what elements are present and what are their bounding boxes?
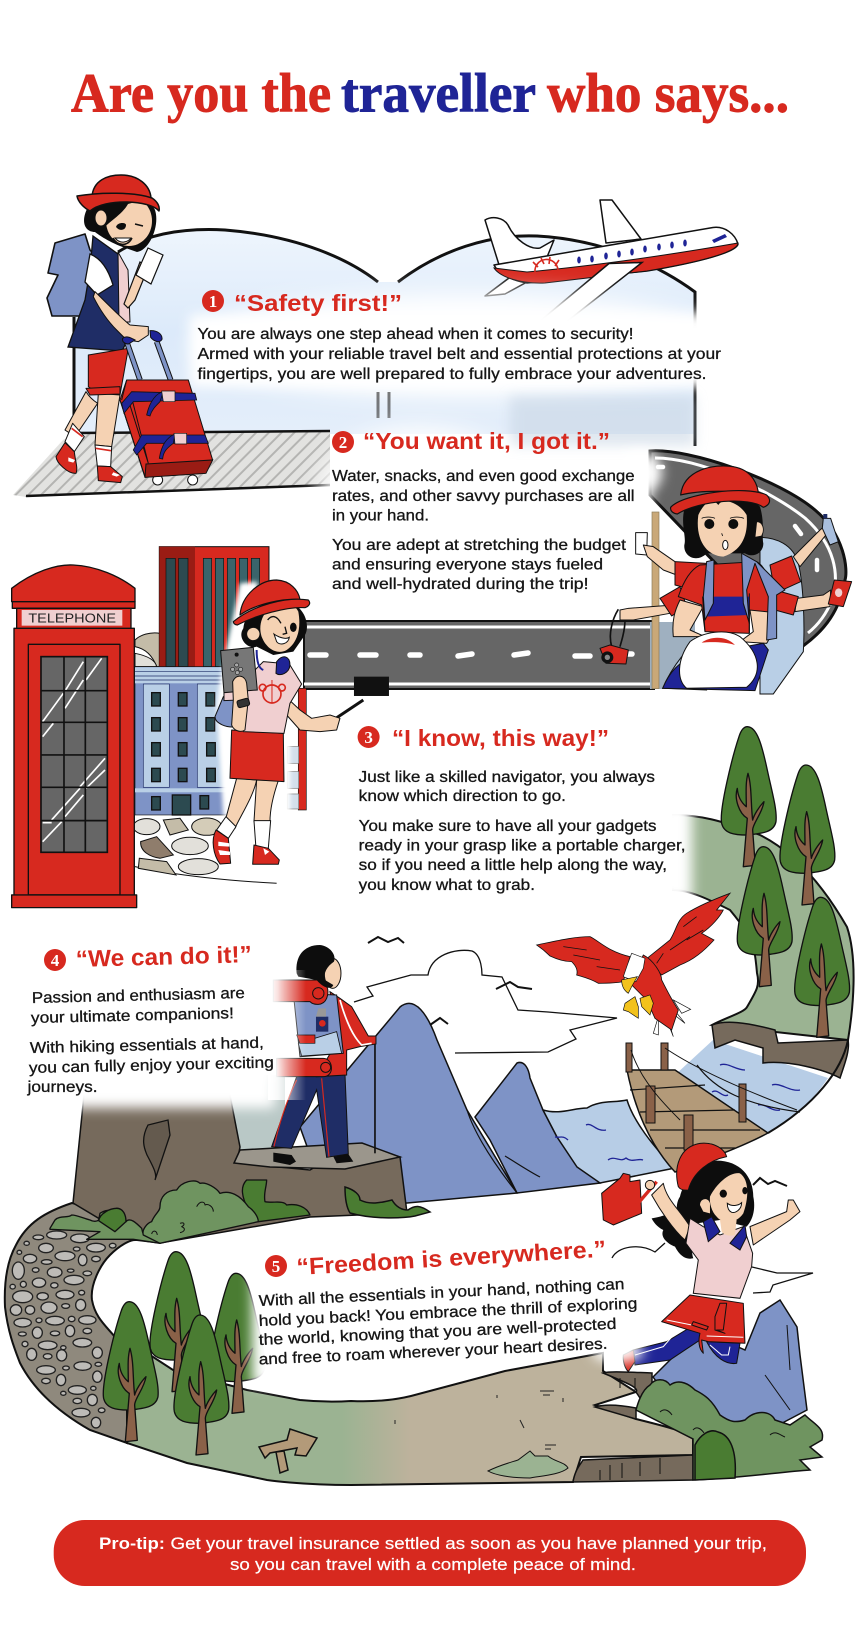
text: 1 Safety first: fingertips, you are well prepared to fully embrace your adventures. bbox=[198, 366, 706, 383]
icon: red telephone booth: TELEPHONE bbox=[28, 611, 116, 626]
torso bbox=[673, 600, 705, 637]
text: 4 We can do it: With hiking essentials at hand, bbox=[30, 1035, 264, 1057]
sleeve bbox=[85, 254, 113, 295]
text: 2 You want it: rates, and other savvy purchases are all bbox=[332, 488, 635, 505]
character: jumping traveller bbox=[602, 1143, 800, 1372]
text: 4 We can do it: 4 bbox=[51, 951, 60, 970]
shirt bbox=[686, 1218, 753, 1298]
arms bbox=[652, 1183, 690, 1240]
headphones bbox=[276, 657, 290, 675]
panel: airport window scene bbox=[13, 230, 695, 497]
text: 1 Safety first: Armed with your reliable travel belt and essential protections at your bbox=[198, 346, 721, 363]
selfie stick bbox=[318, 700, 363, 730]
puddle grass bbox=[488, 1451, 568, 1478]
back sleeves bbox=[675, 562, 707, 593]
mountains bbox=[300, 1003, 517, 1210]
text: 1 Safety first bbox=[198, 290, 721, 383]
panel: mountain lake and river landscape bbox=[300, 815, 854, 1210]
character: multi-armed traveller in seat bbox=[600, 466, 852, 694]
pole bbox=[652, 512, 659, 689]
text: 3 I know, this way: you know what to grab. bbox=[359, 877, 535, 894]
panel: lower ground with path bbox=[127, 1340, 693, 1485]
card hand bbox=[636, 533, 647, 555]
panel: city scene with buildings and stones bbox=[133, 547, 306, 883]
passport arm bbox=[795, 590, 831, 612]
pack bbox=[293, 993, 343, 1057]
title bbox=[71, 62, 789, 124]
jacket at waist bbox=[662, 1295, 745, 1353]
text: 5 Freedom is everywhere: hold you back! You embrace the thrill of exploring bbox=[258, 1295, 638, 1330]
text: 2 You want it: “You want it, I got it.” bbox=[363, 428, 610, 454]
lower cliffs bbox=[573, 1372, 693, 1482]
callout: pro-tip: Pro-tip: bbox=[99, 1534, 165, 1553]
face bbox=[710, 1173, 747, 1222]
white haze over hiker pack and cliff top bbox=[60, 960, 306, 1108]
seat bbox=[757, 537, 804, 694]
text: 5 Freedom is everywhere: With all the essentials in your hand, nothing can bbox=[258, 1276, 625, 1310]
jacket bbox=[317, 992, 376, 1077]
illustration: tree cluster lower left bbox=[103, 1252, 292, 1455]
text: 4 We can do it: you can fully enjoy your exciting bbox=[29, 1054, 274, 1077]
backpack bbox=[215, 693, 243, 727]
text: 5 Freedom is everywhere: “Freedom is everywhere.” bbox=[296, 1236, 607, 1280]
character: hiker with backpack bbox=[272, 945, 376, 1165]
cobblestones bbox=[135, 817, 293, 883]
hat bbox=[240, 580, 300, 615]
river cliff bbox=[712, 1022, 848, 1078]
text: 1 Safety first: 1 bbox=[209, 292, 217, 311]
arm to grip bbox=[93, 292, 148, 342]
hair and head bbox=[683, 497, 763, 558]
text: 4 We can do it: journeys. bbox=[26, 1079, 97, 1096]
callout: pro-tip bbox=[54, 1520, 806, 1586]
callout: pro-tip: so you can travel with a complete peace of mind. bbox=[230, 1555, 636, 1574]
white fade around figure bbox=[217, 582, 290, 817]
red tower bbox=[159, 547, 269, 667]
icon: red eagle bbox=[537, 893, 730, 1037]
text: 2 You want it: and ensuring everyone stays fueled bbox=[332, 556, 603, 574]
lower body drawn in crop units bbox=[56, 292, 213, 485]
pants bbox=[272, 1074, 348, 1157]
white haze near jumper leg bbox=[592, 1342, 644, 1362]
hair back bbox=[652, 1161, 754, 1259]
icon: airplane bbox=[485, 200, 738, 323]
text: 4 We can do it: “We can do it!” bbox=[75, 941, 252, 972]
legs bbox=[225, 778, 257, 828]
hat bbox=[677, 1143, 727, 1190]
illustration: right rock and bushes bbox=[636, 1300, 823, 1480]
head bbox=[241, 600, 307, 655]
white haze at hill edge bbox=[620, 803, 692, 901]
white haze behind text 1 bbox=[190, 293, 735, 552]
text: 3 I know, this way bbox=[358, 725, 686, 894]
illustration: tree cluster right bbox=[721, 727, 850, 1037]
text: 4 We can do it: Passion and enthusiasm are bbox=[32, 985, 245, 1007]
head bbox=[84, 201, 156, 252]
text: 1 Safety first: “Safety first!” bbox=[234, 290, 402, 316]
text: 5 Freedom is everywhere bbox=[258, 1236, 638, 1368]
text: 3 I know, this way: “I know, this way!” bbox=[392, 725, 609, 751]
text: 4 We can do it: your ultimate companions! bbox=[31, 1005, 234, 1027]
shirt bbox=[224, 662, 302, 733]
signpost bbox=[259, 1429, 317, 1473]
text: 2 You want it: You are adept at stretching the budget bbox=[332, 537, 627, 554]
text: 1 Safety first: You are always one step ahead when it comes to security! bbox=[198, 326, 634, 343]
text: 3 I know, this way: 3 bbox=[364, 728, 373, 747]
blue building bbox=[135, 667, 233, 815]
title: Are you the bbox=[71, 62, 331, 124]
dock bbox=[627, 1070, 768, 1172]
character: traveller taking selfie bbox=[213, 580, 389, 864]
text: 2 You want it bbox=[332, 428, 635, 593]
title: who says... bbox=[547, 62, 789, 124]
title: traveller bbox=[341, 62, 536, 124]
bushes on cliff base bbox=[50, 1180, 310, 1243]
backpack bbox=[47, 234, 118, 316]
bottle arm bbox=[793, 525, 827, 567]
text: 3 I know, this way: ready in your grasp like a portable charger, bbox=[359, 838, 686, 854]
text: 5 Freedom is everywhere: 5 bbox=[272, 1257, 280, 1276]
panel: hiker cliff and path bbox=[5, 1075, 430, 1443]
tablet and hand bbox=[221, 647, 257, 693]
arm to stick bbox=[287, 700, 340, 732]
text: 5 Freedom is everywhere: and free to roam wherever your heart desires. bbox=[258, 1336, 608, 1368]
stone road bbox=[5, 1203, 160, 1443]
text: 2 You want it: in your hand. bbox=[332, 508, 429, 524]
dark pants and white bag bbox=[663, 643, 768, 691]
cliff bbox=[225, 1075, 285, 1160]
text: 2 You want it: and well-hydrated during the trip! bbox=[332, 576, 588, 593]
text: 2 You want it: 2 bbox=[339, 433, 347, 452]
icon: red telephone booth bbox=[12, 565, 137, 908]
pants bbox=[633, 1313, 713, 1365]
text: 3 I know, this way: Just like a skilled navigator, you always bbox=[359, 769, 655, 786]
text: 4 We can do it bbox=[26, 941, 274, 1096]
camera arm bbox=[620, 605, 673, 620]
text: 3 I know, this way: You make sure to have all your gadgets bbox=[359, 818, 657, 835]
head bbox=[324, 958, 341, 988]
arm and card bbox=[124, 262, 148, 308]
vest bbox=[68, 236, 125, 351]
callout: pro-tip: Get your travel insurance settled as soon as you have planned your trip, bbox=[170, 1534, 767, 1553]
stick bbox=[372, 1038, 377, 1153]
character: traveller with suitcase bbox=[47, 175, 213, 485]
bag bbox=[602, 1173, 642, 1225]
hat bbox=[681, 466, 758, 495]
text: 5 Freedom is everywhere: the world, knowing that you are well-protected bbox=[258, 1316, 617, 1349]
ground specks bbox=[395, 1391, 563, 1449]
rolled mats bbox=[273, 980, 328, 1004]
text: 3 I know, this way: know which direction to go. bbox=[359, 788, 566, 805]
text: 2 You want it: Water, snacks, and even good exchange bbox=[332, 468, 635, 485]
panel: winding road bbox=[304, 450, 846, 689]
skirt bbox=[230, 730, 284, 782]
text: 3 I know, this way: so if you need a little help along the way, bbox=[359, 857, 667, 874]
river bbox=[675, 1040, 828, 1133]
headphones bbox=[703, 1217, 747, 1250]
clouds and birds bbox=[354, 937, 813, 1293]
hill and green bank bbox=[673, 815, 854, 1040]
lake bbox=[543, 1100, 675, 1183]
